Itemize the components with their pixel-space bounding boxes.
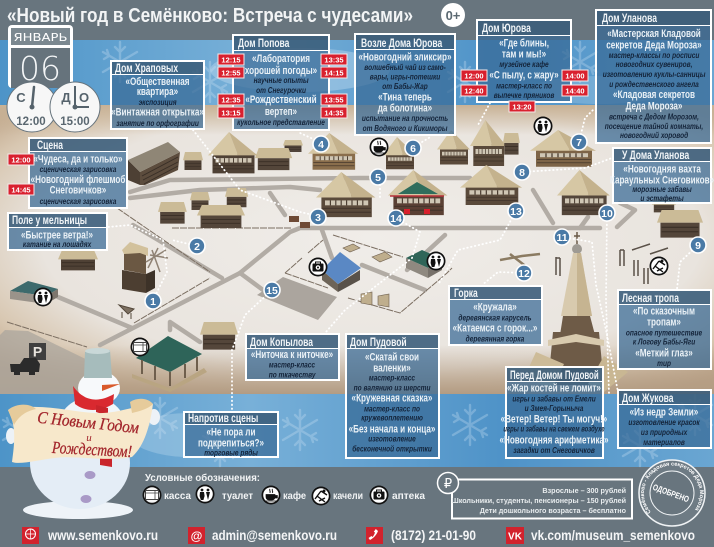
- panel: Дом Уланова: изготовлению куклы-санницы: [603, 69, 706, 79]
- panel: Возле Дома Юрова: волшебный чай из само-: [364, 62, 446, 72]
- time tags: Сцена: 12:00: [11, 156, 31, 164]
- fences: [7, 208, 452, 347]
- panel: Дом Попова: от Снегурочки: [256, 85, 306, 95]
- panel: Дом Храповых: [111, 61, 204, 129]
- marker 15: 15: [266, 285, 278, 297]
- panel: Дом Уланова: «Кладовая секретов: [613, 89, 695, 101]
- legend: касса: касса: [164, 490, 191, 502]
- ticket prices: ₽: [444, 477, 452, 492]
- panel: Лесная тропа: тир: [657, 358, 671, 368]
- clock: closing time: [50, 82, 100, 132]
- panel: У Дома Уланова: У Дома Уланова: [622, 150, 690, 162]
- panel: Лесная тропа: [618, 290, 711, 369]
- website: www.semenkovo.ru: [47, 527, 158, 543]
- houses: central row: [308, 133, 358, 170]
- marker 15: [264, 282, 280, 298]
- buttons: [84, 471, 96, 479]
- panel: Возле Дома Юрова: «Новогодний эликсир»: [358, 51, 452, 64]
- marker 9: 9: [695, 240, 701, 252]
- snowman feet: [23, 501, 133, 519]
- time tags: Дом Попова: [218, 54, 347, 118]
- village houses: [58, 120, 703, 350]
- panel: Дом Храповых: экспозиция: [139, 97, 177, 107]
- panel: Горка: «Катаемся с горок...»: [453, 322, 537, 335]
- phone: (8172) 21-01-90: [391, 527, 476, 543]
- marker 5: 5: [375, 172, 381, 184]
- panel: У Дома Уланова: [610, 148, 714, 203]
- panel: Возле Дома Юрова: [355, 34, 455, 135]
- toilet shed on field: [10, 281, 58, 304]
- marker 13: 13: [510, 206, 522, 218]
- panel: Дом Пудовой: [346, 334, 439, 458]
- panel: Сцена: [29, 138, 127, 208]
- small well: [119, 305, 134, 319]
- icon: toilet on field: [34, 288, 52, 306]
- swings and slide: [500, 244, 668, 284]
- icon: swings: [650, 256, 668, 276]
- phone: [366, 527, 476, 544]
- panel: Сцена: «Чудеса, да и только»: [33, 153, 123, 166]
- legend: аптека: аптека: [392, 490, 425, 502]
- panel: Дом Копылова: [246, 334, 339, 380]
- panel: Сцена: сценическая зарисовка: [40, 196, 116, 206]
- marker 2: 2: [194, 241, 200, 253]
- windmill: [122, 242, 168, 293]
- panel: Дом Жукова: материалов: [643, 437, 685, 447]
- marker 6: 6: [410, 143, 416, 155]
- calendar date card: 06: [19, 49, 61, 88]
- time tags: Дом Попова: 14:15: [324, 68, 344, 78]
- legend: туалет: туалет: [222, 490, 253, 502]
- houses: west row: [128, 142, 180, 185]
- marker 8: [514, 164, 530, 180]
- parking sign: P: [33, 344, 42, 360]
- panel: Дом Попова: научные опыты: [254, 75, 309, 85]
- marker 6: [405, 140, 421, 156]
- marker 10: [599, 205, 615, 221]
- panel: Дом Жукова: из природных: [641, 427, 688, 437]
- panel: Поле у мельницы: Поле у мельницы: [12, 215, 87, 227]
- time tags: Дом Юрова: 12:00: [464, 72, 484, 80]
- marker 14: 14: [390, 213, 402, 225]
- panel: Дом Уланова: Дом Уланова: [602, 13, 657, 25]
- map facility icons: [34, 116, 668, 356]
- legend heading: Условные обозначения:: [145, 472, 260, 484]
- panel: Перед Домом Пудовой: «Новогодняя арифметика»: [499, 434, 609, 447]
- panel: Дом Пудовой: Дом Пудовой: [350, 337, 407, 349]
- email: [188, 527, 337, 544]
- panel: Горка: деревянная горка: [466, 334, 524, 344]
- panel: Перед Домом Пудовой: Перед Домом Пудовой: [510, 370, 599, 383]
- dotted routes: [108, 103, 698, 410]
- panel: Дом Юрова: «Где блины,: [499, 37, 549, 50]
- clock: closing time: 15:00: [60, 116, 90, 128]
- panel: Поле у мельницы: катание на лошадях: [23, 239, 92, 249]
- marker 14: [388, 210, 404, 226]
- icon: ticket office: [130, 338, 150, 356]
- panel: Перед Домом Пудовой: игры и забавы от Емели: [512, 394, 596, 404]
- panel: Перед Домом Пудовой: загадки от Снеговичков: [513, 445, 595, 455]
- marker 4: [313, 136, 329, 152]
- marker 4: 4: [318, 139, 324, 151]
- panel: Поле у мельницы: [8, 213, 107, 250]
- legend: касса: [142, 486, 191, 504]
- calendar date card: ЯНВАРЬ: [14, 31, 68, 44]
- time tags: Дом Попова: 12:35: [221, 96, 241, 104]
- church: [525, 232, 628, 392]
- panel: Дом Пудовой: по валянию из шерсти: [354, 383, 431, 393]
- panel: Дом Пудовой: валенки»: [373, 362, 411, 375]
- marker 11: [554, 229, 570, 245]
- snowman body: [30, 417, 130, 509]
- panel: Дом Уланова: новогодних сувениров,: [616, 59, 692, 69]
- panel: Дом Попова: вертеп»: [265, 106, 297, 118]
- panel: Дом Копылова: по ткачеству: [269, 370, 316, 380]
- panel: Дом Уланова: секретов Деда Мороза»: [606, 39, 702, 52]
- mittens: [6, 428, 16, 444]
- panel: Перед Домом Пудовой: «Жар костей не ломит»: [507, 382, 601, 395]
- panel: Перед Домом Пудовой: «Ветер! Ветер! Ты могуч!»: [501, 413, 607, 426]
- panel: Сцена: Снеговичков»: [50, 184, 106, 197]
- panel: Дом Храповых: Дом Храповых: [115, 63, 178, 75]
- ticket prices: Школьники, студенты, пенсионеры – 150 рублей: [451, 496, 626, 505]
- marker 3: [310, 209, 326, 225]
- houses: south west: [58, 250, 98, 270]
- icon: first aid: [308, 258, 328, 276]
- panel: Возле Дома Юрова: да болотина»: [378, 102, 432, 115]
- calendar date card: [8, 25, 73, 88]
- panel: Напротив сцены: [184, 412, 278, 458]
- vk: VK: [508, 532, 523, 542]
- picnic tables: [343, 244, 392, 307]
- greeting scroll banner: Рождеством!: [51, 438, 132, 461]
- panel: Лесная тропа: к Логову Бабы-Яги: [633, 337, 696, 347]
- panel: Дом Пудовой: мастер-класс: [369, 373, 415, 383]
- icon: toilet near Yurov house: [534, 116, 552, 136]
- legend: кафе: кафе: [283, 490, 306, 502]
- panel: У Дома Уланова: Караульных Снеговиков»: [610, 174, 714, 187]
- panel: Дом Уланова: и рождественского ангела: [609, 79, 699, 89]
- panel: Дом Юрова: [477, 20, 571, 102]
- panel: Возле Дома Юрова: от Водяного и Кикиморы: [363, 123, 448, 133]
- panel: Дом Уланова: «Мастерская Кладовой: [607, 28, 701, 40]
- clock: closing time: О: [79, 90, 89, 105]
- clock: opening time: С: [16, 90, 26, 105]
- panel: Дом Жукова: Дом Жукова: [622, 393, 674, 405]
- panel: Дом Пудовой: «Скатай свои: [365, 351, 419, 364]
- panel: Дом Копылова: мастер-класс: [269, 360, 315, 370]
- panel: Напротив сцены: подкрепиться?»: [198, 437, 264, 450]
- green roof service building: [406, 250, 442, 278]
- time tags: Сцена: [8, 154, 34, 195]
- panel: Сцена: Сцена: [37, 140, 63, 152]
- contacts row: [22, 527, 695, 544]
- marker 8: 8: [519, 167, 525, 179]
- email: admin@semenkovo.ru: [212, 527, 337, 543]
- panel: Поле у мельницы: «Быстрее ветра!»: [21, 229, 93, 242]
- approval stamp: ОДОБРЕНО: [651, 482, 691, 504]
- panel: Дом Юрова: мастер-класс по: [496, 81, 553, 91]
- ticket prices: Взрослые – 300 рублей: [542, 486, 626, 495]
- clock: closing time: Д: [61, 90, 71, 105]
- marker 10: 10: [601, 208, 613, 220]
- time tags: Дом Попова: 13:15: [221, 108, 241, 118]
- panel: У Дома Уланова: «Новогодняя вахта: [623, 163, 701, 176]
- panel: Дом Юрова: выпечке пряников: [494, 90, 555, 100]
- panel: Дом Юрова: там и мы!»: [502, 48, 546, 61]
- houses: east row: [470, 120, 506, 166]
- panel: Лесная тропа: опасное путешествие: [626, 328, 702, 338]
- panel: Дом Юрова: «С пылу, с жару»: [489, 69, 559, 82]
- panel: Дом Храповых: квартира»: [137, 86, 178, 98]
- roads on the map: [0, 178, 635, 394]
- marker 7: 7: [576, 137, 582, 149]
- marker 7: [571, 134, 587, 150]
- panel: Дом Пудовой: мастер-класс по: [364, 404, 421, 414]
- panel: Горка: «Кружала»: [473, 301, 517, 314]
- panel: Напротив сцены: Напротив сцены: [188, 413, 258, 425]
- panel: Дом Храповых: «Общественная: [125, 76, 190, 88]
- panel: Дом Уланова: [596, 10, 711, 143]
- panel: Дом Юрова: музейное кафе: [499, 59, 549, 69]
- time tags: Дом Юрова: 14:00: [565, 72, 585, 80]
- panel: Дом Храповых: «Винтажная открытка»: [111, 106, 204, 119]
- panel: Возле Дома Юрова: испытание на прочность: [362, 113, 448, 123]
- marker 12: [516, 265, 532, 281]
- marker 12: 12: [518, 268, 530, 280]
- approval stamp: Семёнково - Кладовая секретов Деда Мороза: [641, 462, 704, 514]
- ticket prices: [438, 472, 632, 518]
- marker 5: [370, 169, 386, 185]
- time tags: Дом Юрова: 14:40: [565, 86, 585, 96]
- panel: Лесная тропа: тропам»: [647, 316, 681, 329]
- panel: Лесная тропа: «По сказочным: [633, 305, 695, 318]
- panel: Лесная тропа: «Меткий глаз»: [635, 347, 693, 360]
- panel: Дом Пудовой: «Без начала и конца»: [349, 423, 435, 436]
- panel: Дом Попова: «Лаборатория: [252, 53, 310, 65]
- marker 1: 1: [150, 296, 156, 308]
- time tags: Дом Юрова: 12:40: [464, 86, 484, 96]
- icon: toilet near stage: [426, 252, 446, 270]
- panel: Сцена: «Новогодний флешмоб: [31, 174, 125, 186]
- panel: Дом Пудовой: кружевоплетению: [361, 413, 424, 423]
- title: «Новый год в Семёнково: Встреча с чудесами»: [7, 4, 413, 27]
- panel: У Дома Уланова: и эстафеты: [640, 193, 684, 203]
- legend: туалет: [196, 484, 253, 504]
- marker 2: [189, 238, 205, 254]
- panel: Дом Жукова: [618, 390, 711, 448]
- panel: Перед Домом Пудовой: и Змея-Горыныча: [525, 403, 583, 413]
- panel: Дом Копылова: Дом Копылова: [250, 337, 313, 349]
- email: @: [191, 529, 202, 543]
- marker 1: [145, 293, 161, 309]
- time tags: Дом Юрова: 13:20: [512, 102, 532, 112]
- panel: Дом Попова: Дом Попова: [238, 38, 290, 50]
- ticket prices: Дети дошкольного возраста – бесплатно: [480, 506, 627, 515]
- time tags: Дом Попова: 13:35: [324, 56, 344, 64]
- time tags: Дом Попова: 14:35: [324, 108, 344, 118]
- panel: Возле Дома Юрова: от Бабы-Жар: [382, 81, 428, 91]
- panel: Дом Уланова: мастер-классы по росписи: [609, 50, 700, 60]
- snowman: [6, 348, 160, 519]
- greeting scroll banner: [8, 399, 153, 463]
- panel: Перед Домом Пудовой: [499, 367, 609, 458]
- panel: Дом Пудовой: изготовление: [368, 434, 416, 444]
- panel: Дом Уланова: новогодний хоровод: [620, 130, 689, 140]
- panel: Лесная тропа: Лесная тропа: [622, 293, 679, 305]
- marker 13: [508, 203, 524, 219]
- panel: Горка: деревянская карусель: [458, 313, 532, 323]
- panel: Сцена: сценическая зарисовка: [40, 164, 116, 174]
- green pavilion: [132, 336, 207, 392]
- panel: Дом Храповых: занятие по орфографии: [116, 118, 199, 128]
- panel: Возле Дома Юрова: «Тина теперь: [378, 91, 432, 104]
- parking sign: [10, 343, 46, 375]
- clock: opening time: [7, 82, 57, 132]
- panel: Дом Жукова: изготовление красок: [628, 417, 700, 427]
- first aid blue house: [322, 252, 361, 292]
- panel: Дом Жукова: «Из недр Земли»: [630, 406, 698, 419]
- panel: Дом Уланова: Деда Мороза»: [626, 100, 682, 113]
- legend: качели: качели: [333, 490, 363, 502]
- time tags: Дом Попова: 13:55: [324, 96, 344, 104]
- panel: Дом Пудовой: бесконечной открытки: [352, 444, 432, 454]
- legend: аптека: [370, 486, 425, 504]
- red scarf: [73, 386, 114, 410]
- legend: качели: [312, 486, 363, 506]
- panel: Дом Пудовой: «Кружевная сказка»: [352, 392, 432, 405]
- panel: Возле Дома Юрова: Возле Дома Юрова: [361, 38, 443, 50]
- carrot nose: [102, 384, 120, 391]
- website: [22, 527, 158, 544]
- time tags: Дом Попова: 12:15: [221, 56, 241, 64]
- panel: У Дома Уланова: морозные забавы: [632, 184, 692, 194]
- marker 3: 3: [315, 212, 321, 224]
- marker 9: [690, 237, 706, 253]
- panel: Возле Дома Юрова: вары, игры-потешки: [370, 72, 441, 82]
- horse carts: [289, 216, 310, 228]
- panel: Дом Уланова: посещение тайной комнаты,: [605, 121, 703, 131]
- legend: кафе: [262, 486, 306, 504]
- panel: Напротив сцены: торговые ряды: [204, 448, 259, 458]
- panel: Напротив сцены: «Не пора ли: [207, 426, 256, 439]
- greeting scroll banner: С Новым Годом: [36, 408, 140, 437]
- panel: Горка: Горка: [454, 288, 478, 300]
- panel: Дом Копылова: «Ниточка к ниточке»: [251, 349, 333, 361]
- panel: Дом Юрова: Дом Юрова: [482, 23, 531, 35]
- time tags: Дом Юрова: [461, 70, 588, 112]
- panel: Дом Попова: кукольное представление: [237, 117, 325, 127]
- legend: [142, 472, 425, 506]
- panel: Дом Попова: «Рождественский: [245, 94, 317, 106]
- marker 11: 11: [556, 232, 568, 244]
- numbered location markers: [145, 134, 706, 309]
- age badge 0+: 0+: [446, 8, 461, 23]
- panel: Горка: [449, 286, 542, 345]
- greeting scroll banner: и: [86, 432, 92, 444]
- panel: Дом Попова: хорошей погоды»: [245, 65, 317, 77]
- panel: Дом Уланова: встреча с Дедом Морозом,: [609, 112, 699, 122]
- panel: Дом Попова: [233, 35, 329, 130]
- time tags: Сцена: 14:45: [11, 186, 31, 194]
- icon: cafe: [370, 138, 388, 156]
- time tags: Дом Попова: 12:55: [221, 68, 241, 78]
- clock: opening time: 12:00: [16, 116, 46, 128]
- age badge 0+: [441, 3, 465, 27]
- snowman head: [78, 371, 120, 405]
- panel: Перед Домом Пудовой: игры и забавы на свежем воздухе: [503, 425, 605, 434]
- bucket hat: [84, 350, 112, 378]
